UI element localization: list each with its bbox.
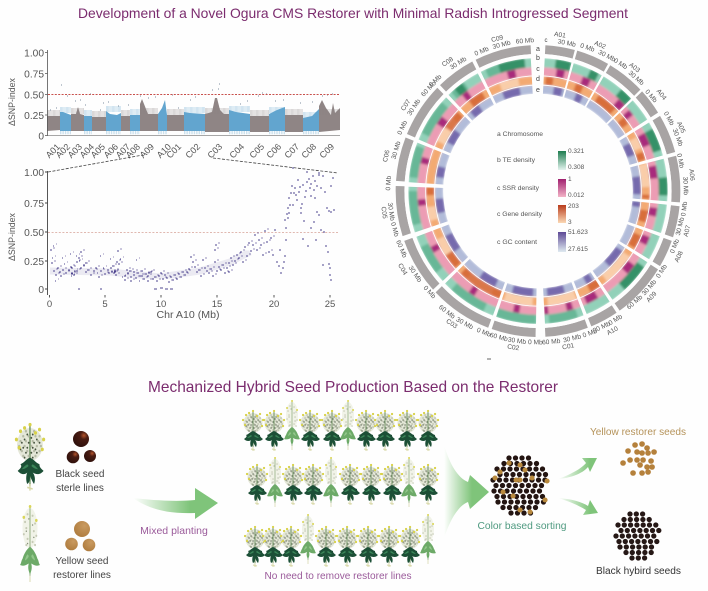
y tick labels: 0.50 xyxy=(24,90,44,102)
label: yellow seed restorer lines: Yellow seed xyxy=(55,556,109,567)
tick and chromosome labels: 30 Mb xyxy=(562,333,582,344)
tick and chromosome labels: 30 Mb xyxy=(449,56,468,71)
tick and chromosome labels: 0 Mb xyxy=(675,153,685,169)
icon: black seed plant xyxy=(16,425,44,491)
tick and chromosome labels: 0 Mb xyxy=(669,238,681,254)
tick and chromosome labels: 0 Mb xyxy=(385,175,393,191)
tick and chromosome labels: A07 xyxy=(683,224,693,238)
x axis title: Chr A10 (Mb) xyxy=(156,310,220,321)
legend: c Gene density xyxy=(497,211,543,218)
tick and chromosome labels: C02 xyxy=(507,343,520,352)
Manhattan blue chromosome points xyxy=(60,100,319,132)
Manhattan grey chromosome points xyxy=(47,98,340,132)
scatter points xyxy=(50,168,335,289)
chromosome labels: A07 xyxy=(114,142,132,160)
tick and chromosome labels: 0 Mb xyxy=(662,111,675,127)
threshold line xyxy=(48,94,340,96)
seed pile: black xyxy=(616,514,661,558)
label: yellow seed restorer lines: restorer lines xyxy=(53,570,111,581)
tick and chromosome labels: 60 Mb xyxy=(437,304,456,321)
tick and chromosome labels: A08 xyxy=(674,250,685,264)
x tick labels: 20 xyxy=(269,299,279,310)
chromosome labels: C01 xyxy=(165,142,183,160)
ring letters: e xyxy=(536,87,540,94)
label: mixed planting: Mixed planting xyxy=(140,525,208,537)
ring letters: b xyxy=(536,55,540,62)
tick and chromosome labels: C08 xyxy=(441,56,455,69)
x tick labels: 15 xyxy=(212,299,222,310)
chromosome labels: C07 xyxy=(283,142,301,160)
tick and chromosome labels: 30 Mb xyxy=(627,70,645,87)
y axis xyxy=(45,171,330,298)
tick and chromosome labels: A02 xyxy=(593,40,607,51)
tick and chromosome labels: 30 Mb xyxy=(671,128,684,148)
legend: a Chromosome xyxy=(497,131,543,138)
ring letters: c xyxy=(536,66,540,73)
x tick labels xyxy=(47,299,335,310)
legend: 0.308 xyxy=(568,164,585,171)
label: black seed sterile lines: sterle lines xyxy=(56,483,104,494)
tick and chromosome labels: 0 Mb xyxy=(579,42,596,54)
chromosome labels: C03 xyxy=(206,142,224,160)
y tick labels: 1.00 xyxy=(24,168,44,179)
tick and chromosome labels: A10 xyxy=(606,325,620,337)
chromosome labels: A05 xyxy=(89,142,107,160)
tick and chromosome labels: 30 Mb xyxy=(492,40,512,51)
seed pile: mixed xyxy=(493,458,549,513)
tick and chromosome labels: A01 xyxy=(554,31,567,40)
tick and chromosome labels: C01 xyxy=(562,342,575,351)
chromosome labels: C04 xyxy=(228,142,246,160)
chromosome labels: A03 xyxy=(66,142,84,160)
ring letters xyxy=(536,38,548,94)
tick and chromosome labels: 0 Mb xyxy=(474,46,490,58)
A10 peak xyxy=(165,51,168,142)
ring letters: a xyxy=(536,46,540,53)
tick and chromosome labels: 0 Mb xyxy=(582,328,598,339)
x tick labels: 5 xyxy=(102,299,108,310)
legend: 1 xyxy=(568,176,572,183)
x tick labels: 0 xyxy=(47,299,52,310)
chart: Chr A10 SNP-index scatter xyxy=(7,168,338,321)
legend: 51.623 xyxy=(568,229,588,236)
tick and chromosome labels: 30 Mb xyxy=(675,216,686,236)
y tick labels: 0.75 xyxy=(24,70,44,80)
tick and chromosome labels: 0 Mb xyxy=(422,285,437,300)
y tick labels: 0.75 xyxy=(24,199,44,210)
tick and chromosome labels: 60 Mb xyxy=(542,338,561,347)
y tick labels: 0.50 xyxy=(24,228,44,239)
arrow: to black seeds xyxy=(558,498,598,515)
y tick labels: 0 xyxy=(38,132,44,142)
tick and chromosome labels: C07 xyxy=(400,98,413,112)
label: yellow seed restorer lines xyxy=(53,556,111,581)
chromosome labels: A09 xyxy=(138,142,156,160)
tick and chromosome labels: 30 Mb xyxy=(455,316,474,331)
legend: c GC content xyxy=(497,239,537,246)
y tick labels: 0.25 xyxy=(24,111,44,122)
legend xyxy=(497,131,588,253)
tick and chromosome labels: 60 Mb xyxy=(489,332,509,343)
label: color based sorting: Color based sorting xyxy=(478,520,567,532)
tick and chromosome labels: 0 Mb xyxy=(528,339,543,346)
ring d: gene density xyxy=(430,80,646,302)
y axis title: ΔSNP-index xyxy=(7,212,17,261)
tick and chromosome labels: 0 Mb xyxy=(389,222,400,238)
section heading: Mechanized Hybrid Seed Production Based on the Restorer xyxy=(148,379,559,396)
legend: 27.615 xyxy=(568,246,588,253)
arrow: field to seed pile xyxy=(444,445,489,538)
tick and chromosome labels: 30 Mb xyxy=(391,140,402,160)
panel: parent lines xyxy=(16,425,111,582)
chromosome labels: C06 xyxy=(265,142,283,160)
y axis title: ΔSNP-index xyxy=(7,77,17,126)
tick and chromosome labels: 60 Mb xyxy=(515,37,535,46)
tick and chromosome labels: 0 Mb xyxy=(397,120,409,136)
tick and chromosome labels: 0 Mb xyxy=(428,73,444,89)
tick and chromosome labels: 30 Mb xyxy=(406,98,423,117)
baseline xyxy=(48,134,340,136)
legend: 0.012 xyxy=(568,192,585,199)
ring c: SSR density xyxy=(421,72,655,310)
chromosome labels: C09 xyxy=(318,142,336,160)
tick and chromosome labels: 0 Mb xyxy=(608,313,624,327)
tick and chromosome labels: 30 Mb xyxy=(597,49,617,64)
chart: circular genome plot xyxy=(379,31,695,359)
tick and chromosome labels: 30 Mb xyxy=(641,279,658,297)
chromosome labels: C05 xyxy=(248,142,266,160)
tick and chromosome labels: A09 xyxy=(645,290,659,304)
ring a: chromosome xyxy=(400,50,676,332)
y axis xyxy=(45,50,48,136)
legend: c SSR density xyxy=(497,185,540,192)
ring e: GC content xyxy=(439,90,637,292)
ring separators xyxy=(406,56,670,326)
label: no need to remove restorer lines: No need to remove restorer lines xyxy=(264,571,412,582)
seed pile: yellow xyxy=(623,444,654,473)
sparse outlier points xyxy=(50,84,333,110)
y tick labels: 1.00 xyxy=(24,48,44,60)
tick and chromosome labels: A06 xyxy=(687,169,695,181)
tick and chromosome labels: 0 Mb xyxy=(643,89,658,105)
x tick labels: 25 xyxy=(325,299,335,310)
chromosome labels: A01 xyxy=(44,142,62,160)
rings xyxy=(400,50,676,332)
tick and chromosome labels: C06 xyxy=(382,149,392,163)
tick and chromosome labels: 60 Mb xyxy=(626,294,644,311)
tick and chromosome labels: 30 Mb xyxy=(407,265,423,284)
legend: 3 xyxy=(568,219,572,226)
sector gaps xyxy=(425,75,651,307)
tick and chromosome labels: 0 Mb xyxy=(475,327,492,339)
tick and chromosome labels: C09 xyxy=(491,34,504,44)
tick and chromosome labels: A04 xyxy=(655,88,668,102)
label: black hybrid seeds: Black hybird seeds xyxy=(596,566,681,577)
tick and chromosome labels: A05 xyxy=(675,121,686,135)
tick and chromosome labels: 0 Mb xyxy=(612,57,629,71)
ring letters: d xyxy=(536,76,540,83)
tick and chromosome labels: C04 xyxy=(396,262,408,277)
chromosome labels: C08 xyxy=(300,142,318,160)
ring letters: c xyxy=(544,38,548,44)
chart: genome-wide SNP-index Manhattan plot xyxy=(7,48,340,160)
icon: black seeds xyxy=(67,431,96,463)
label: black seed sterile lines: Black seed xyxy=(56,469,104,480)
tick and chromosome labels: 30 Mb xyxy=(592,320,612,335)
y tick labels: 0 xyxy=(38,285,44,296)
legend: 203 xyxy=(568,203,579,210)
tick and chromosome labels xyxy=(379,31,695,352)
tick and chromosome labels: 30 Mb xyxy=(507,337,527,346)
ring b: TE density xyxy=(413,62,663,320)
panel: field plants xyxy=(243,401,438,567)
legend: 0.321 xyxy=(568,148,585,155)
chromosome labels: A02 xyxy=(54,142,72,160)
y tick labels xyxy=(24,168,44,296)
tick and chromosome labels: 60 Mb xyxy=(420,80,438,98)
y tick labels xyxy=(24,48,44,142)
chromosome labels: C02 xyxy=(184,142,202,160)
label: yellow restorer seeds: Yellow restorer seeds xyxy=(590,427,686,438)
tick and chromosome labels: 30 Mb xyxy=(681,177,689,195)
arrow: to yellow seeds xyxy=(558,458,597,479)
tick and chromosome labels: 0 Mb xyxy=(680,201,689,217)
tick and chromosome labels: 60 Mb xyxy=(394,239,408,259)
chromosome labels xyxy=(44,142,336,160)
tick and chromosome labels: 30 Mb xyxy=(386,202,395,222)
chromosome labels: A08 xyxy=(124,142,142,160)
threshold line xyxy=(48,232,338,234)
tick and chromosome labels: 30 Mb xyxy=(557,38,577,49)
arrow: to mixed planting xyxy=(133,488,218,519)
tick and chromosome labels: 0 Mb xyxy=(655,263,669,280)
icon: yellow seeds xyxy=(65,521,95,551)
chromosome labels: A10 xyxy=(155,142,173,160)
y tick labels: 0.25 xyxy=(24,257,44,268)
title: Development of a Novel Ogura CMS Restorer with Minimal Radish Introgressed Segment xyxy=(78,5,628,21)
legend: b TE density xyxy=(497,157,536,164)
icon: yellow seed plant xyxy=(20,507,40,582)
tick and chromosome labels: C03 xyxy=(445,318,459,331)
density band xyxy=(50,252,250,277)
tick and chromosome labels: C05 xyxy=(379,206,388,219)
zoom connector lines xyxy=(48,155,338,173)
chromosome labels: A06 xyxy=(102,142,120,160)
stray mark xyxy=(487,358,491,360)
chromosome labels: A04 xyxy=(78,142,96,160)
label: black seed sterile lines xyxy=(56,469,104,494)
tick and chromosome labels: A03 xyxy=(627,62,641,74)
x tick labels: 10 xyxy=(156,299,166,310)
